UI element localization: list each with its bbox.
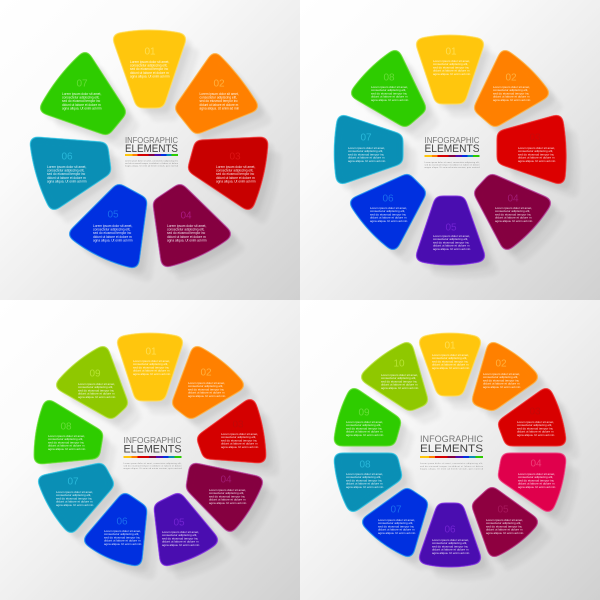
- segment 05 indigo: 05: [173, 518, 185, 528]
- segment 02 orange: consectetur adipiscing elit,: [493, 88, 528, 92]
- segment 01 yellow: 01: [144, 46, 156, 58]
- segment 08 teal: agna aliqua. Ut enim ad min: [346, 485, 384, 489]
- centre title: [124, 435, 182, 470]
- segment 07 teal: 07: [67, 476, 79, 488]
- segment 02 orange: didunt ut labore et dolore m: [200, 103, 239, 107]
- segment 06 blue: 06: [382, 194, 394, 204]
- segment 06 teal: sed do eiusmod tempor inc: [47, 172, 86, 176]
- segment 01 yellow: sed do eiusmod tempor inc: [433, 65, 470, 69]
- segment 08 green: sed do eiusmod tempor inc: [48, 440, 85, 444]
- segment 06 indigo: didunt ut labore et dolore m: [432, 548, 469, 552]
- segment 06 blue: [356, 180, 420, 244]
- segment 03 red: agna aliqua. Ut enim ad min: [221, 445, 259, 449]
- segment 05 blue: [75, 190, 141, 262]
- segment 03 red: didunt ut labore et dolore m: [518, 156, 555, 160]
- centre title: [125, 135, 178, 167]
- segment 06 blue: sed do eiusmod tempor inc: [104, 535, 141, 539]
- segment 08 teal: sed do eiusmod tempor inc: [346, 478, 383, 482]
- segment 05 maroon: didunt ut labore et dolore m: [486, 528, 523, 532]
- segment 05 indigo: [422, 202, 479, 259]
- segment 09 lime: [62, 352, 122, 413]
- segment 03 red: Lorem ipsum dolor sit amet,: [517, 420, 554, 424]
- segment 05 indigo: Lorem ipsum dolor sit amet,: [162, 530, 199, 534]
- segment 04 maroon: consectetur adipiscing elit,: [209, 491, 244, 495]
- segment 04 purple: [159, 190, 225, 261]
- segment 02 orange: consectetur adipiscing elit,: [483, 375, 518, 379]
- segment 05 maroon: consectetur adipiscing elit,: [486, 521, 521, 525]
- segment 09 green: 09: [358, 408, 370, 418]
- segment 08 teal: consectetur adipiscing elit,: [346, 475, 381, 479]
- segment 03 red: 03: [529, 406, 541, 418]
- segment 02 orange: sed do eiusmod tempor inc: [483, 378, 520, 382]
- centre title: Lorem ipsum dolor sit amet, consectetur adipiscing elit,: [124, 462, 182, 465]
- segment 08 green: sed do eiusmod tempor inc: [371, 91, 408, 95]
- segment 03 red: 03: [232, 420, 244, 430]
- panel: nine-segment wheel: [0, 300, 300, 600]
- segment 09 green: didunt ut labore et dolore m: [346, 430, 383, 434]
- segment 07 teal: agna aliqua. Ut enim ad min: [348, 159, 386, 163]
- centre title: Lorem ipsum dolor sit amet, consectetur adipiscing elit,: [424, 161, 480, 164]
- segment 02 orange: Lorem ipsum dolor sit amet,: [493, 85, 530, 89]
- segment 08 green: consectetur adipiscing elit,: [48, 437, 83, 441]
- segment 02 orange: didunt ut labore et dolore m: [493, 95, 530, 99]
- segment 01 yellow: [422, 41, 478, 98]
- segment 08 green: consectetur adipiscing elit,: [371, 88, 406, 92]
- segment 09 lime: consectetur adipiscing elit,: [78, 385, 113, 389]
- segment 07 green: consectetur adipiscing elit,: [62, 96, 99, 100]
- segment 07 green: Lorem ipsum dolor sit amet,: [62, 92, 101, 96]
- segment 05 blue: 05: [107, 210, 119, 220]
- segment 05 indigo: 05: [445, 222, 457, 234]
- segment 04 maroon: 04: [220, 474, 232, 486]
- segment 05 indigo: agna aliqua. Ut enim ad min: [162, 543, 200, 547]
- segment 02 orange: Lorem ipsum dolor sit amet,: [200, 92, 239, 96]
- segment 07 green: agna aliqua. Ut enim ad min: [62, 106, 102, 110]
- centre title: sed do eiusmod tempor incididunt ut labore et dolore: [124, 465, 182, 468]
- segment 01 yellow: consectetur adipiscing elit,: [432, 356, 467, 360]
- segment 06 indigo: [425, 509, 475, 561]
- segment 05 maroon: agna aliqua. Ut enim ad min: [486, 531, 524, 535]
- segment 06 blue: [90, 499, 142, 560]
- segment 04 purple: agna aliqua. Ut enim ad min: [167, 238, 207, 242]
- segment 01 yellow: Lorem ipsum dolor sit amet,: [133, 359, 170, 363]
- segment 10 lime: [367, 348, 422, 405]
- segment 04 maroon: consectetur adipiscing elit,: [495, 209, 530, 213]
- segment 04 purple: 04: [180, 210, 192, 222]
- segment 06 indigo: Lorem ipsum dolor sit amet,: [432, 538, 469, 542]
- segment 04 crimson: didunt ut labore et dolore m: [518, 482, 555, 486]
- centre title: INFOGRAPHIC: [125, 135, 178, 145]
- segment 09 lime: sed do eiusmod tempor inc: [78, 388, 115, 392]
- segment 06 blue: consectetur adipiscing elit,: [370, 209, 405, 213]
- segment 06 blue: Lorem ipsum dolor sit amet,: [104, 529, 141, 533]
- segment 04 purple: didunt ut labore et dolore m: [167, 235, 206, 239]
- segment 06 teal: Lorem ipsum dolor sit amet,: [47, 165, 86, 169]
- segment 04 purple: sed do eiusmod tempor inc: [167, 231, 206, 235]
- segment 03 red: agna aliqua. Ut enim ad min: [517, 433, 555, 437]
- segment 02 orange: [478, 348, 532, 405]
- segment 03 red: [504, 394, 560, 440]
- segment 05 indigo: didunt ut labore et dolore m: [433, 244, 470, 248]
- segment 02 orange: 02: [213, 78, 225, 90]
- panel: eight-segment wheel: [300, 0, 600, 300]
- segment 03 red: Lorem ipsum dolor sit amet,: [216, 165, 255, 169]
- segment 05 blue: didunt ut labore et dolore m: [93, 235, 132, 239]
- segment 05 indigo: consectetur adipiscing elit,: [162, 533, 197, 537]
- segment 09 green: consectetur adipiscing elit,: [346, 423, 381, 427]
- segment 04 purple: consectetur adipiscing elit,: [167, 228, 204, 232]
- segment 07 teal: agna aliqua. Ut enim ad min: [56, 503, 94, 507]
- segment 07 blue: 07: [390, 504, 402, 516]
- segment 08 teal: 08: [359, 460, 371, 470]
- segment 01 yellow: 01: [145, 346, 157, 358]
- segment 05 indigo: Lorem ipsum dolor sit amet,: [433, 234, 470, 238]
- segment 08 teal: [340, 459, 396, 506]
- segment 06 blue: consectetur adipiscing elit,: [104, 532, 139, 536]
- segment 08 green: [357, 56, 420, 121]
- segment 02 orange: 02: [495, 358, 507, 370]
- segment 05 indigo: didunt ut labore et dolore m: [162, 540, 199, 544]
- segment 05 indigo: consectetur adipiscing elit,: [433, 237, 468, 241]
- segment 04 maroon: didunt ut labore et dolore m: [495, 216, 532, 220]
- segment 05 maroon: 05: [497, 504, 509, 516]
- segment 10 lime: sed do eiusmod tempor inc: [381, 379, 418, 383]
- segment 07 green: 07: [76, 78, 88, 90]
- segment 04 maroon: Lorem ipsum dolor sit amet,: [209, 488, 246, 492]
- segment 01 yellow: consectetur adipiscing elit,: [130, 64, 167, 68]
- centre title: ELEMENTS: [124, 444, 182, 456]
- segment 08 green: Lorem ipsum dolor sit amet,: [371, 85, 408, 89]
- segment 08 green: didunt ut labore et dolore m: [371, 95, 408, 99]
- segment 01 yellow: didunt ut labore et dolore m: [432, 363, 469, 367]
- segment 03 red: sed do eiusmod tempor inc: [517, 426, 554, 430]
- segment 01 yellow: sed do eiusmod tempor inc: [432, 359, 469, 363]
- segment 07 green: sed do eiusmod tempor inc: [62, 99, 101, 103]
- segment 03 red: Lorem ipsum dolor sit amet,: [518, 146, 555, 150]
- segment 05 indigo: sed do eiusmod tempor inc: [162, 536, 199, 540]
- segment 07 teal: Lorem ipsum dolor sit amet,: [348, 146, 385, 150]
- segment 04 crimson: [504, 458, 560, 506]
- centre title: ELEMENTS: [420, 443, 483, 455]
- segment 03 red: Lorem ipsum dolor sit amet,: [221, 432, 258, 436]
- segment 05 blue: Lorem ipsum dolor sit amet,: [93, 224, 132, 228]
- segment 06 blue: agna aliqua. Ut enim ad min: [104, 542, 142, 546]
- panel: seven-segment wheel: [0, 0, 300, 300]
- segment 02 orange: consectetur adipiscing elit,: [188, 384, 223, 388]
- segment 06 blue: 06: [116, 516, 128, 528]
- segment 05 indigo: sed do eiusmod tempor inc: [433, 240, 470, 244]
- segment 09 green: Lorem ipsum dolor sit amet,: [346, 420, 383, 424]
- centre title: magna aliqua. Ut enim ad minim veniam, quis nostrud: [125, 164, 178, 167]
- segment 07 blue: agna aliqua. Ut enim ad min: [378, 531, 416, 535]
- segment 04 crimson: Lorem ipsum dolor sit amet,: [518, 472, 555, 476]
- segment 03 red: sed do eiusmod tempor inc: [518, 152, 555, 156]
- segment 07 blue: sed do eiusmod tempor inc: [378, 524, 415, 528]
- segment 07 teal: sed do eiusmod tempor inc: [56, 496, 93, 500]
- segment 01 yellow: didunt ut labore et dolore m: [433, 69, 470, 73]
- centre title: Lorem ipsum dolor sit amet, consectetur adipiscing elit,: [420, 462, 483, 465]
- segment 04 maroon: agna aliqua. Ut enim ad min: [209, 501, 247, 505]
- centre title: sed do eiusmod tempor incididunt ut labore et dolore: [424, 163, 480, 166]
- segment 04 maroon: agna aliqua. Ut enim ad min: [495, 219, 533, 223]
- segment 07 teal: consectetur adipiscing elit,: [348, 149, 383, 153]
- segment 03 red: [203, 405, 260, 457]
- segment 09 lime: Lorem ipsum dolor sit amet,: [78, 382, 115, 386]
- segment 06 blue: Lorem ipsum dolor sit amet,: [370, 206, 407, 210]
- segment 01 yellow: [123, 339, 177, 395]
- segment 02 orange: [480, 56, 543, 121]
- segment 09 lime: didunt ut labore et dolore m: [78, 392, 115, 396]
- segment 04 maroon: Lorem ipsum dolor sit amet,: [495, 206, 532, 210]
- centre title: magna aliqua. Ut enim ad minim veniam, quis nostrud: [124, 467, 182, 470]
- segment 01 yellow: Lorem ipsum dolor sit amet,: [433, 59, 470, 63]
- segment 04 crimson: 04: [530, 458, 542, 470]
- segment 07 blue: Lorem ipsum dolor sit amet,: [378, 518, 415, 522]
- segment 02 orange: agna aliqua. Ut enim ad min: [188, 394, 226, 398]
- segment 03 red: didunt ut labore et dolore m: [221, 442, 258, 446]
- segment 10 lime: didunt ut labore et dolore m: [381, 383, 418, 387]
- segment 06 blue: agna aliqua. Ut enim ad min: [370, 219, 408, 223]
- segment 05 indigo: [160, 499, 212, 560]
- centre title: INFOGRAPHIC: [124, 435, 182, 445]
- segment 06 blue: didunt ut labore et dolore m: [104, 539, 141, 543]
- segment 01 yellow: agna aliqua. Ut enim ad min: [130, 74, 170, 78]
- segment 01 yellow: 01: [444, 340, 456, 352]
- centre title: sed do eiusmod tempor incididunt ut labore et dolore: [125, 162, 178, 165]
- segment 08 green: [40, 406, 97, 458]
- segment 03 red: 03: [529, 132, 541, 144]
- segment 02 orange: [181, 59, 252, 128]
- segment 05 blue: sed do eiusmod tempor inc: [93, 231, 132, 235]
- segment 04 crimson: consectetur adipiscing elit,: [518, 475, 553, 479]
- segment 04 maroon: sed do eiusmod tempor inc: [209, 494, 246, 498]
- segment 08 green: didunt ut labore et dolore m: [48, 444, 85, 448]
- segment 10 lime: Lorem ipsum dolor sit amet,: [381, 373, 418, 377]
- segment 08 green: 08: [60, 422, 72, 432]
- segment 09 green: agna aliqua. Ut enim ad min: [346, 433, 384, 437]
- segment 08 green: 08: [383, 72, 395, 84]
- segment 01 yellow: didunt ut labore et dolore m: [130, 71, 169, 75]
- segment 01 yellow: [119, 36, 180, 102]
- segment 07 teal: [340, 121, 397, 178]
- segment 06 indigo: 06: [444, 524, 456, 536]
- segment 01 yellow: consectetur adipiscing elit,: [133, 362, 168, 366]
- segment 05 maroon: sed do eiusmod tempor inc: [486, 524, 523, 528]
- segment 03 red: agna aliqua. Ut enim ad min: [216, 179, 256, 183]
- segment 04 maroon: [192, 469, 257, 526]
- segment 06 indigo: consectetur adipiscing elit,: [432, 541, 467, 545]
- segment 01 yellow: sed do eiusmod tempor inc: [133, 365, 170, 369]
- centre title: [424, 135, 480, 169]
- segment 03 red: consectetur adipiscing elit,: [517, 423, 552, 427]
- centre title: magna aliqua. Ut enim ad minim veniam, quis nostrud: [420, 468, 483, 471]
- centre title: sed do eiusmod tempor incididunt ut labore et dolore: [420, 465, 483, 468]
- segment 03 red: consectetur adipiscing elit,: [221, 435, 256, 439]
- segment 01 yellow: agna aliqua. Ut enim ad min: [133, 372, 171, 376]
- segment 07 green: [46, 58, 120, 129]
- segment 02 orange: sed do eiusmod tempor inc: [188, 387, 225, 391]
- segment 04 maroon: [480, 180, 545, 244]
- segment 03 red: [503, 121, 560, 178]
- segment 07 teal: [44, 469, 108, 527]
- segment 06 teal: agna aliqua. Ut enim ad min: [47, 179, 87, 183]
- segment 01 yellow: consectetur adipiscing elit,: [433, 62, 468, 66]
- segment 07 blue: didunt ut labore et dolore m: [378, 528, 415, 532]
- centre title: ELEMENTS: [125, 143, 178, 155]
- segment 10 lime: consectetur adipiscing elit,: [381, 376, 416, 380]
- segment 02 orange: Lorem ipsum dolor sit amet,: [188, 381, 225, 385]
- segment 04 crimson: sed do eiusmod tempor inc: [518, 478, 555, 482]
- segment 10 lime: agna aliqua. Ut enim ad min: [381, 386, 419, 390]
- centre title: Lorem ipsum dolor sit amet, consectetur adipiscing elit,: [125, 160, 178, 162]
- segment 02 orange: sed do eiusmod tempor inc: [493, 91, 530, 95]
- segment 02 orange: agna aliqua. Ut enim ad min: [200, 106, 239, 110]
- segment 08 green: agna aliqua. Ut enim ad min: [371, 98, 409, 102]
- segment 07 teal: 07: [360, 132, 372, 144]
- segment 06 blue: sed do eiusmod tempor inc: [370, 212, 407, 216]
- segment 02 orange: consectetur adipiscing elit,: [200, 96, 237, 100]
- segment 05 indigo: agna aliqua. Ut enim ad min: [433, 247, 471, 251]
- segment 02 orange: Lorem ipsum dolor sit amet,: [483, 372, 520, 376]
- segment 03 red: didunt ut labore et dolore m: [216, 176, 255, 180]
- segment 01 yellow: [425, 339, 475, 390]
- centre title: INFOGRAPHIC: [420, 433, 483, 444]
- segment 01 yellow: agna aliqua. Ut enim ad min: [432, 366, 470, 370]
- segment 02 orange: agna aliqua. Ut enim ad min: [493, 98, 531, 102]
- segment 01 yellow: Lorem ipsum dolor sit amet,: [130, 60, 169, 64]
- segment 07 teal: sed do eiusmod tempor inc: [348, 152, 385, 156]
- centre title: [420, 433, 483, 471]
- segment 07 blue: consectetur adipiscing elit,: [378, 521, 413, 525]
- segment 05 maroon: Lorem ipsum dolor sit amet,: [486, 518, 523, 522]
- segment 02 orange: agna aliqua. Ut enim ad min: [483, 385, 521, 389]
- segment 06 teal: didunt ut labore et dolore m: [47, 176, 86, 180]
- segment 03 red: [194, 143, 262, 204]
- segment 01 yellow: sed do eiusmod tempor inc: [130, 67, 169, 71]
- centre title: magna aliqua. Ut enim ad minim veniam, quis nostrud: [424, 166, 480, 169]
- segment 06 blue: didunt ut labore et dolore m: [370, 216, 407, 220]
- segment 01 yellow: didunt ut labore et dolore m: [133, 369, 170, 373]
- segment 10 lime: 10: [393, 358, 405, 370]
- segment 03 red: consectetur adipiscing elit,: [216, 169, 253, 173]
- segment 05 maroon: [478, 493, 532, 551]
- segment 08 green: agna aliqua. Ut enim ad min: [48, 447, 86, 451]
- segment 09 green: sed do eiusmod tempor inc: [346, 426, 383, 430]
- segment 08 teal: didunt ut labore et dolore m: [346, 482, 383, 486]
- segment 09 lime: agna aliqua. Ut enim ad min: [78, 395, 116, 399]
- segment 02 orange: 02: [505, 72, 517, 84]
- segment 07 teal: Lorem ipsum dolor sit amet,: [56, 490, 93, 494]
- segment 02 orange: sed do eiusmod tempor inc: [200, 99, 238, 103]
- segment 08 green: Lorem ipsum dolor sit amet,: [48, 434, 85, 438]
- segment 01 yellow: 01: [445, 46, 457, 58]
- segment 06 indigo: sed do eiusmod tempor inc: [432, 544, 469, 548]
- segment 04 maroon: sed do eiusmod tempor inc: [495, 212, 532, 216]
- segment 04 purple: Lorem ipsum dolor sit amet,: [167, 224, 206, 228]
- segment 05 blue: agna aliqua. Ut enim ad min: [93, 238, 133, 242]
- segment 07 green: didunt ut labore et dolore m: [62, 103, 101, 107]
- segment 03 red: sed do eiusmod tempor inc: [221, 438, 258, 442]
- segment 02 orange: 02: [200, 368, 212, 378]
- segment 06 teal: [36, 143, 105, 204]
- segment 07 teal: didunt ut labore et dolore m: [348, 156, 385, 160]
- segment 04 maroon: didunt ut labore et dolore m: [209, 498, 246, 502]
- centre title: INFOGRAPHIC: [424, 135, 480, 145]
- segment 03 red: consectetur adipiscing elit,: [518, 149, 553, 153]
- segment 04 crimson: agna aliqua. Ut enim ad min: [518, 485, 556, 489]
- segment 06 indigo: agna aliqua. Ut enim ad min: [432, 551, 470, 555]
- segment 02 orange: didunt ut labore et dolore m: [483, 382, 520, 386]
- segment 03 red: sed do eiusmod tempor inc: [216, 172, 255, 176]
- segment 07 blue: [368, 494, 422, 551]
- segment 03 red: didunt ut labore et dolore m: [517, 430, 554, 434]
- segment 02 orange: [178, 352, 238, 413]
- segment 09 lime: 09: [89, 368, 101, 380]
- segment 01 yellow: Lorem ipsum dolor sit amet,: [432, 353, 469, 357]
- segment 06 teal: consectetur adipiscing elit,: [47, 169, 84, 173]
- segment 07 teal: consectetur adipiscing elit,: [56, 493, 91, 497]
- segment 05 blue: consectetur adipiscing elit,: [93, 228, 130, 232]
- segment 07 teal: didunt ut labore et dolore m: [56, 500, 93, 504]
- segment 09 green: [340, 394, 395, 440]
- segment 02 orange: didunt ut labore et dolore m: [188, 391, 225, 395]
- centre title: ELEMENTS: [424, 143, 480, 155]
- segment 06 teal: 06: [61, 152, 73, 162]
- segment 04 maroon: 04: [507, 194, 519, 204]
- segment 03 red: 03: [229, 152, 241, 162]
- segment 01 yellow: agna aliqua. Ut enim ad min: [433, 72, 471, 76]
- panel: ten-segment wheel: [300, 300, 600, 600]
- segment 03 red: agna aliqua. Ut enim ad min: [518, 159, 556, 163]
- segment 08 teal: Lorem ipsum dolor sit amet,: [346, 472, 383, 476]
